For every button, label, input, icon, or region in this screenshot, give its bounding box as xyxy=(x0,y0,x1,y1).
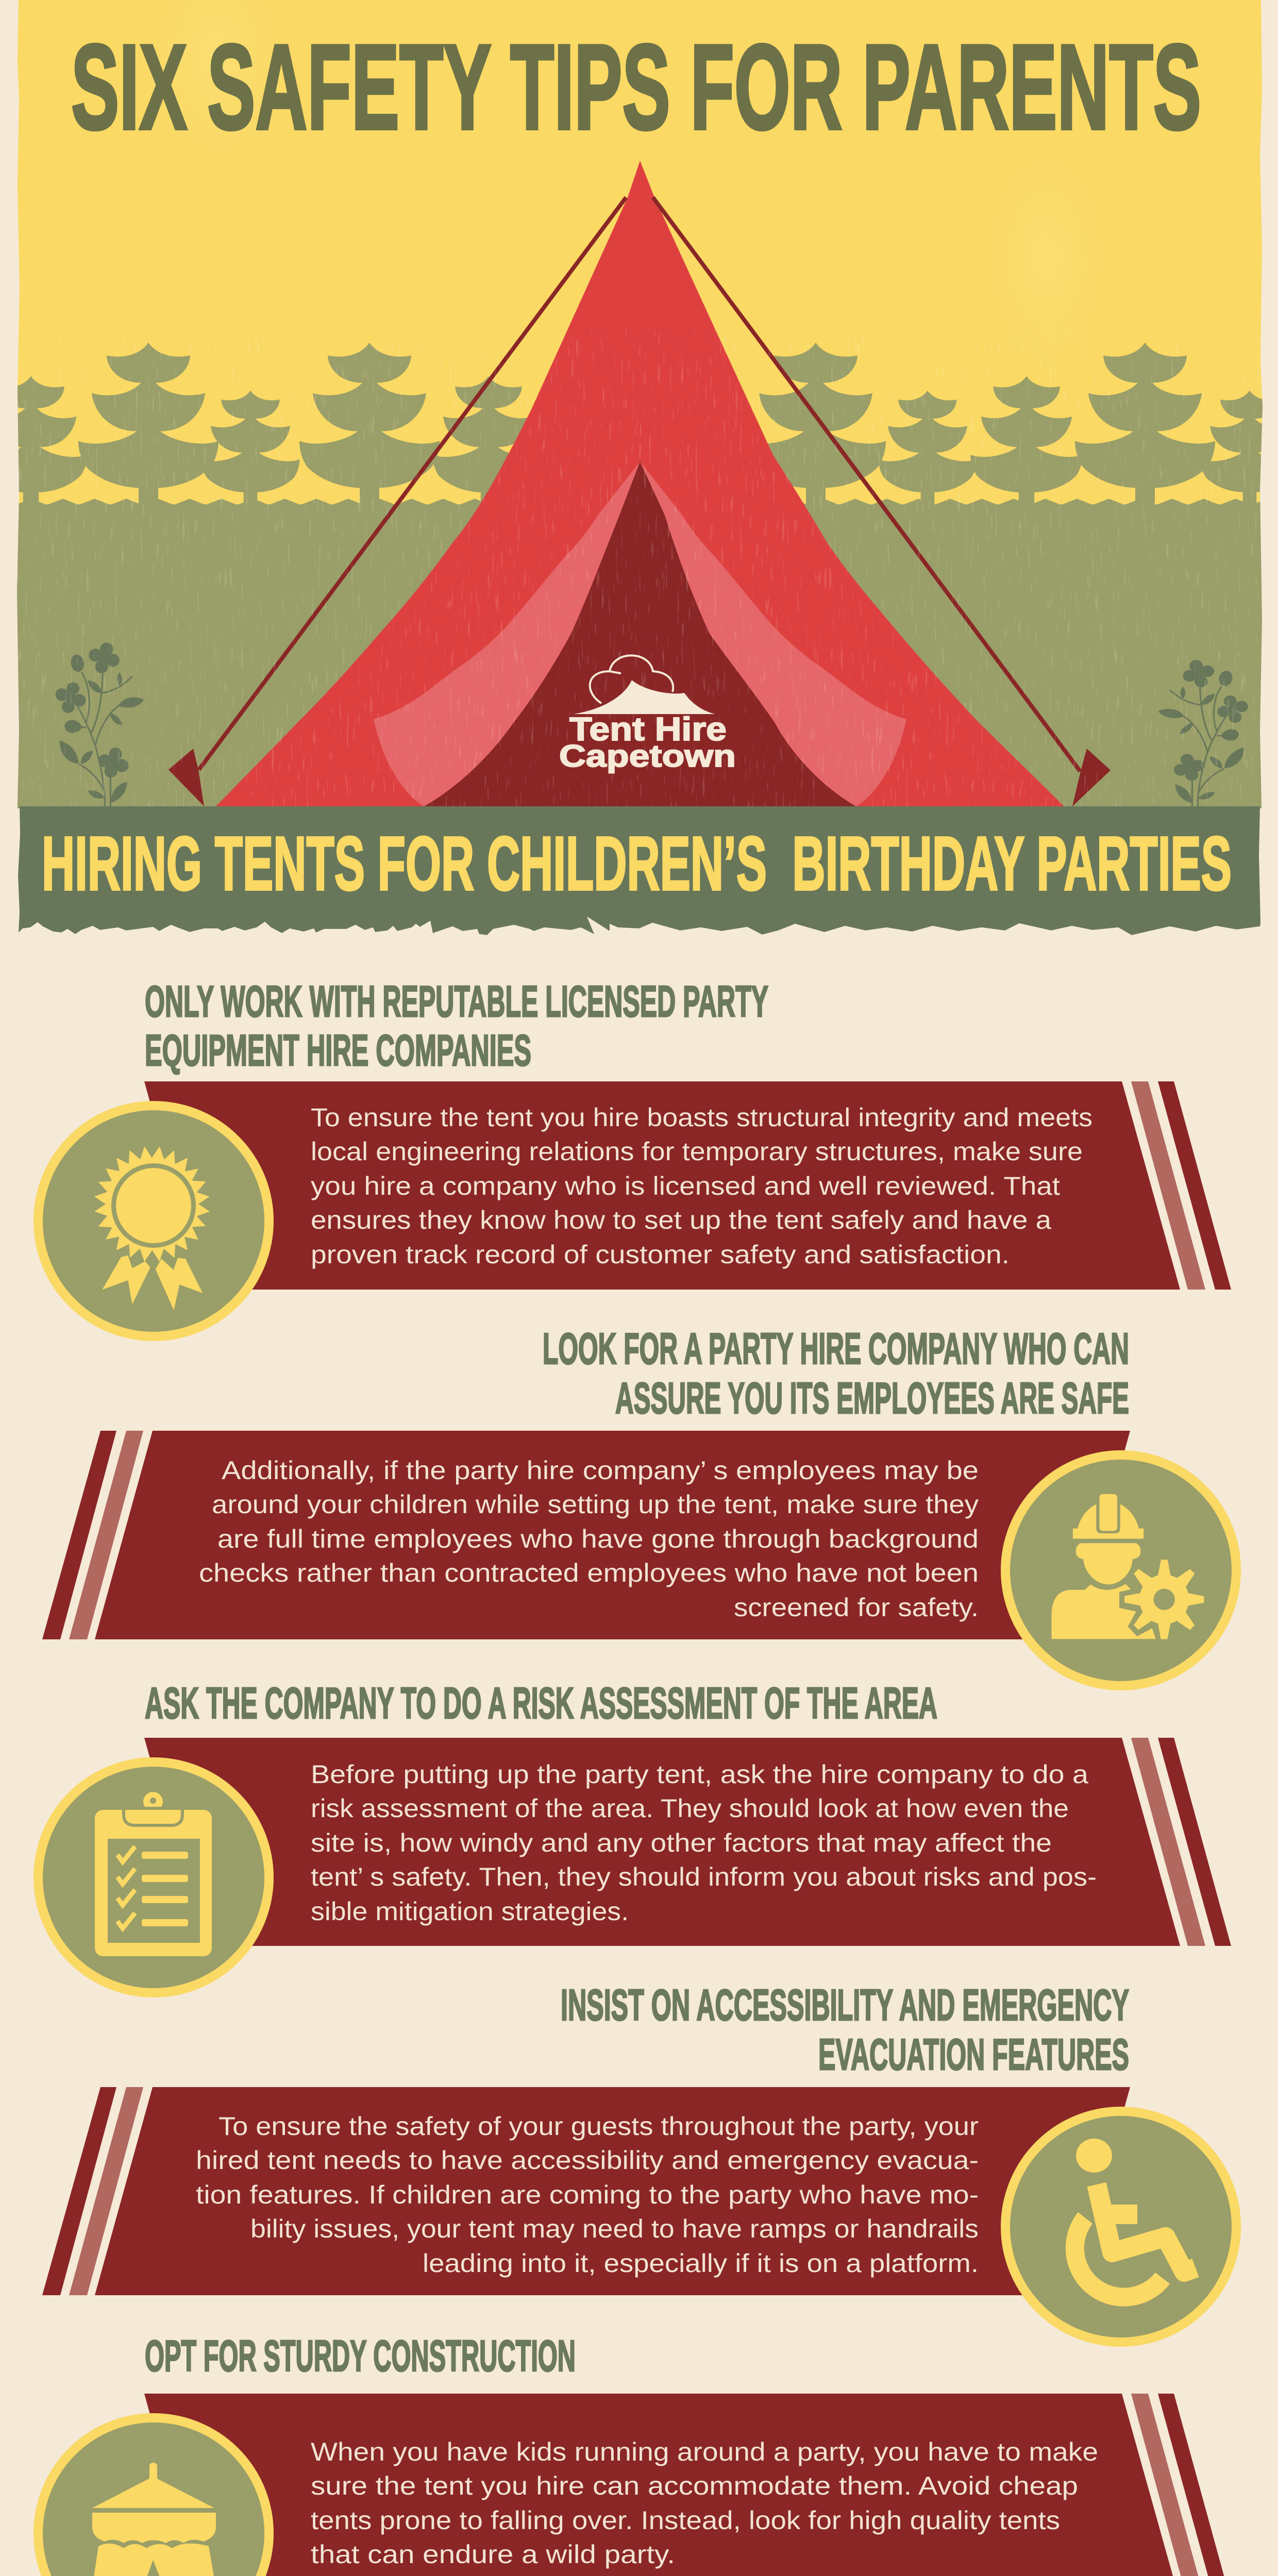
tent door xyxy=(424,462,856,806)
tent canopy xyxy=(216,161,1064,806)
yellow sky xyxy=(15,0,1265,515)
icon: award rosette xyxy=(38,1106,269,1336)
panel: tip 5 sturdy construction xyxy=(38,2332,1231,2576)
forest of trees xyxy=(0,343,1278,808)
hero illustration xyxy=(0,0,1278,935)
icon: worker with gear xyxy=(1005,1455,1236,1686)
ribbon tip 2 xyxy=(42,1431,1130,1639)
tent xyxy=(216,161,1064,806)
heading tip 2 xyxy=(543,1325,1129,1423)
heading tip 5: OPT FOR STURDY CONSTRUCTION xyxy=(145,2332,576,2381)
tent logo: Capetown xyxy=(559,739,736,773)
tent logo: Tent Hire xyxy=(569,710,727,748)
body text tip 1: ensures they know how to set up the tent safely and have a xyxy=(311,1206,1051,1234)
body text tip 4: tion features. If children are coming to the party who have mo- xyxy=(196,2180,979,2209)
body text tip 2: are full time employees who have gone through background xyxy=(217,1524,979,1553)
guy rope left xyxy=(169,197,626,806)
body text tip 1 xyxy=(311,1103,1092,1269)
panel: tip 2 safe employees xyxy=(42,1325,1236,1686)
heading tip 1: EQUIPMENT HIRE COMPANIES xyxy=(145,1026,531,1075)
body text tip 3: sible mitigation strategies. xyxy=(311,1897,629,1926)
body text tip 2: checks rather than contracted employees who have not been xyxy=(199,1558,979,1587)
icon: wheelchair xyxy=(1005,2111,1236,2342)
heading tip 1 xyxy=(145,977,768,1075)
ribbon tip 3 xyxy=(144,1738,1231,1946)
subtitle banner xyxy=(18,806,1260,935)
body text tip 1: you hire a company who is licensed and well reviewed. That xyxy=(311,1172,1060,1200)
panel: tip 3 risk assessment xyxy=(38,1679,1231,1993)
body text tip 5: that can endure a wild party. xyxy=(311,2540,675,2569)
body text tip 3: Before putting up the party tent, ask the hire company to do a xyxy=(311,1760,1088,1789)
body text tip 2 xyxy=(199,1456,979,1622)
body text tip 5: sure the tent you hire can accommodate them. Avoid cheap xyxy=(311,2471,1078,2500)
body text tip 3: risk assessment of the area. They should look at how even the xyxy=(311,1794,1069,1823)
icon: clipboard checklist xyxy=(38,1762,269,1993)
body text tip 3: tent’ s safety. Then, they should inform you about risks and pos- xyxy=(311,1862,1097,1891)
body text tip 4: bility issues, your tent may need to have ramps or handrails xyxy=(250,2214,979,2243)
ribbon tip 4 xyxy=(42,2087,1130,2295)
paper grain xyxy=(15,330,1265,809)
plant left xyxy=(56,642,144,806)
panel: tip 4 accessibility xyxy=(42,1981,1236,2342)
body text tip 4 xyxy=(196,2112,979,2278)
body text tip 3: site is, how windy and any other factors that may affect the xyxy=(311,1828,1052,1857)
body text tip 5 xyxy=(311,2437,1098,2569)
tent flaps xyxy=(374,462,906,806)
heading tip 4 xyxy=(561,1981,1129,2079)
guy rope right xyxy=(653,197,1111,806)
body text tip 5: tents prone to falling over. Instead, look for high quality tents xyxy=(311,2506,1060,2535)
tent logo xyxy=(559,655,736,773)
body text tip 4: leading into it, especially if it is on a platform. xyxy=(423,2249,979,2278)
body text tip 2: screened for safety. xyxy=(734,1593,979,1622)
panel: tip 1 licensed companies xyxy=(38,977,1231,1336)
body text tip 1: local engineering relations for temporary structures, make sure xyxy=(311,1137,1083,1166)
body text tip 2: Additionally, if the party hire company’ s employees may be xyxy=(222,1456,979,1485)
body text tip 1: To ensure the tent you hire boasts structural integrity and meets xyxy=(311,1103,1092,1132)
body text tip 1: proven track record of customer safety and satisfaction. xyxy=(311,1240,1010,1269)
heading tip 1: ONLY WORK WITH REPUTABLE LICENSED PARTY xyxy=(145,977,768,1026)
icon: circus tent xyxy=(38,2418,269,2576)
body text tip 3 xyxy=(311,1760,1097,1926)
ribbon tip 5 xyxy=(144,2394,1231,2576)
body text tip 5: When you have kids running around a party, you have to make xyxy=(311,2437,1098,2466)
body text tip 2: around your children while setting up the tent, make sure they xyxy=(212,1490,979,1519)
body text tip 4: hired tent needs to have accessibility and emergency evacua- xyxy=(196,2146,979,2175)
ribbon tip 1 xyxy=(144,1081,1231,1290)
body text tip 4: To ensure the safety of your guests throughout the party, your xyxy=(218,2112,979,2141)
plant right xyxy=(1158,660,1248,806)
